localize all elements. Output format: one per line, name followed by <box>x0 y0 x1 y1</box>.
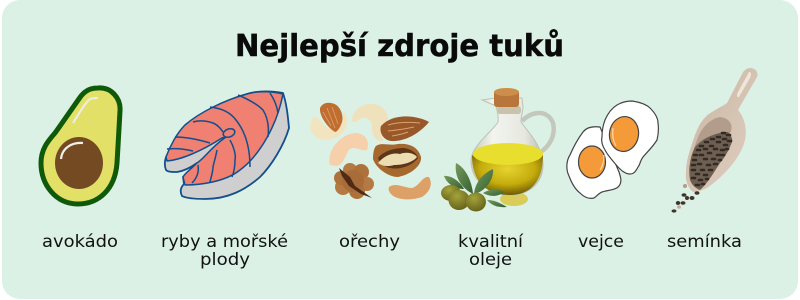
nut: bottom cashew <box>389 177 431 199</box>
seed pile <box>689 132 732 190</box>
jar foot <box>500 192 528 206</box>
jar body <box>471 98 543 195</box>
title: Nejlepší zdroje tuků <box>235 28 564 64</box>
label: ryby a mořské plody: plody <box>200 250 250 270</box>
jar neck <box>497 106 521 114</box>
olive leaves <box>444 163 507 207</box>
nut: top cashew <box>352 104 389 141</box>
oil <box>472 155 543 195</box>
cork <box>494 90 519 107</box>
label: kvalitní oleje: kvalitní <box>458 232 524 252</box>
icon: scoop of seeds <box>672 68 758 213</box>
olives <box>441 185 461 201</box>
falling seeds <box>672 191 700 213</box>
label: kvalitní oleje <box>458 232 524 270</box>
nut: pale cashew under almond <box>310 111 347 140</box>
icon: salmon steak <box>165 91 289 199</box>
icon: olive oil jar with olives <box>441 88 554 212</box>
nut: walnut <box>334 163 374 199</box>
nut: pink cashew <box>329 133 368 166</box>
label: ořechy: ořechy <box>339 232 400 252</box>
icon: avocado <box>41 88 120 204</box>
label: ryby a mořské plody <box>161 232 288 270</box>
label: semínka: semínka <box>667 232 742 252</box>
label: kvalitní oleje: oleje <box>469 250 512 270</box>
nut: small almond <box>320 103 343 132</box>
icon: mixed nuts <box>310 103 431 199</box>
jar handle <box>522 113 554 152</box>
nut: large almond <box>380 116 429 141</box>
label: ryby a mořské plody: ryby a mořské <box>161 232 288 252</box>
label: vejce: vejce <box>578 232 624 252</box>
nut: pecan <box>373 144 421 177</box>
label: avokádo: avokádo <box>42 232 118 252</box>
icon: fried eggs <box>567 101 658 198</box>
